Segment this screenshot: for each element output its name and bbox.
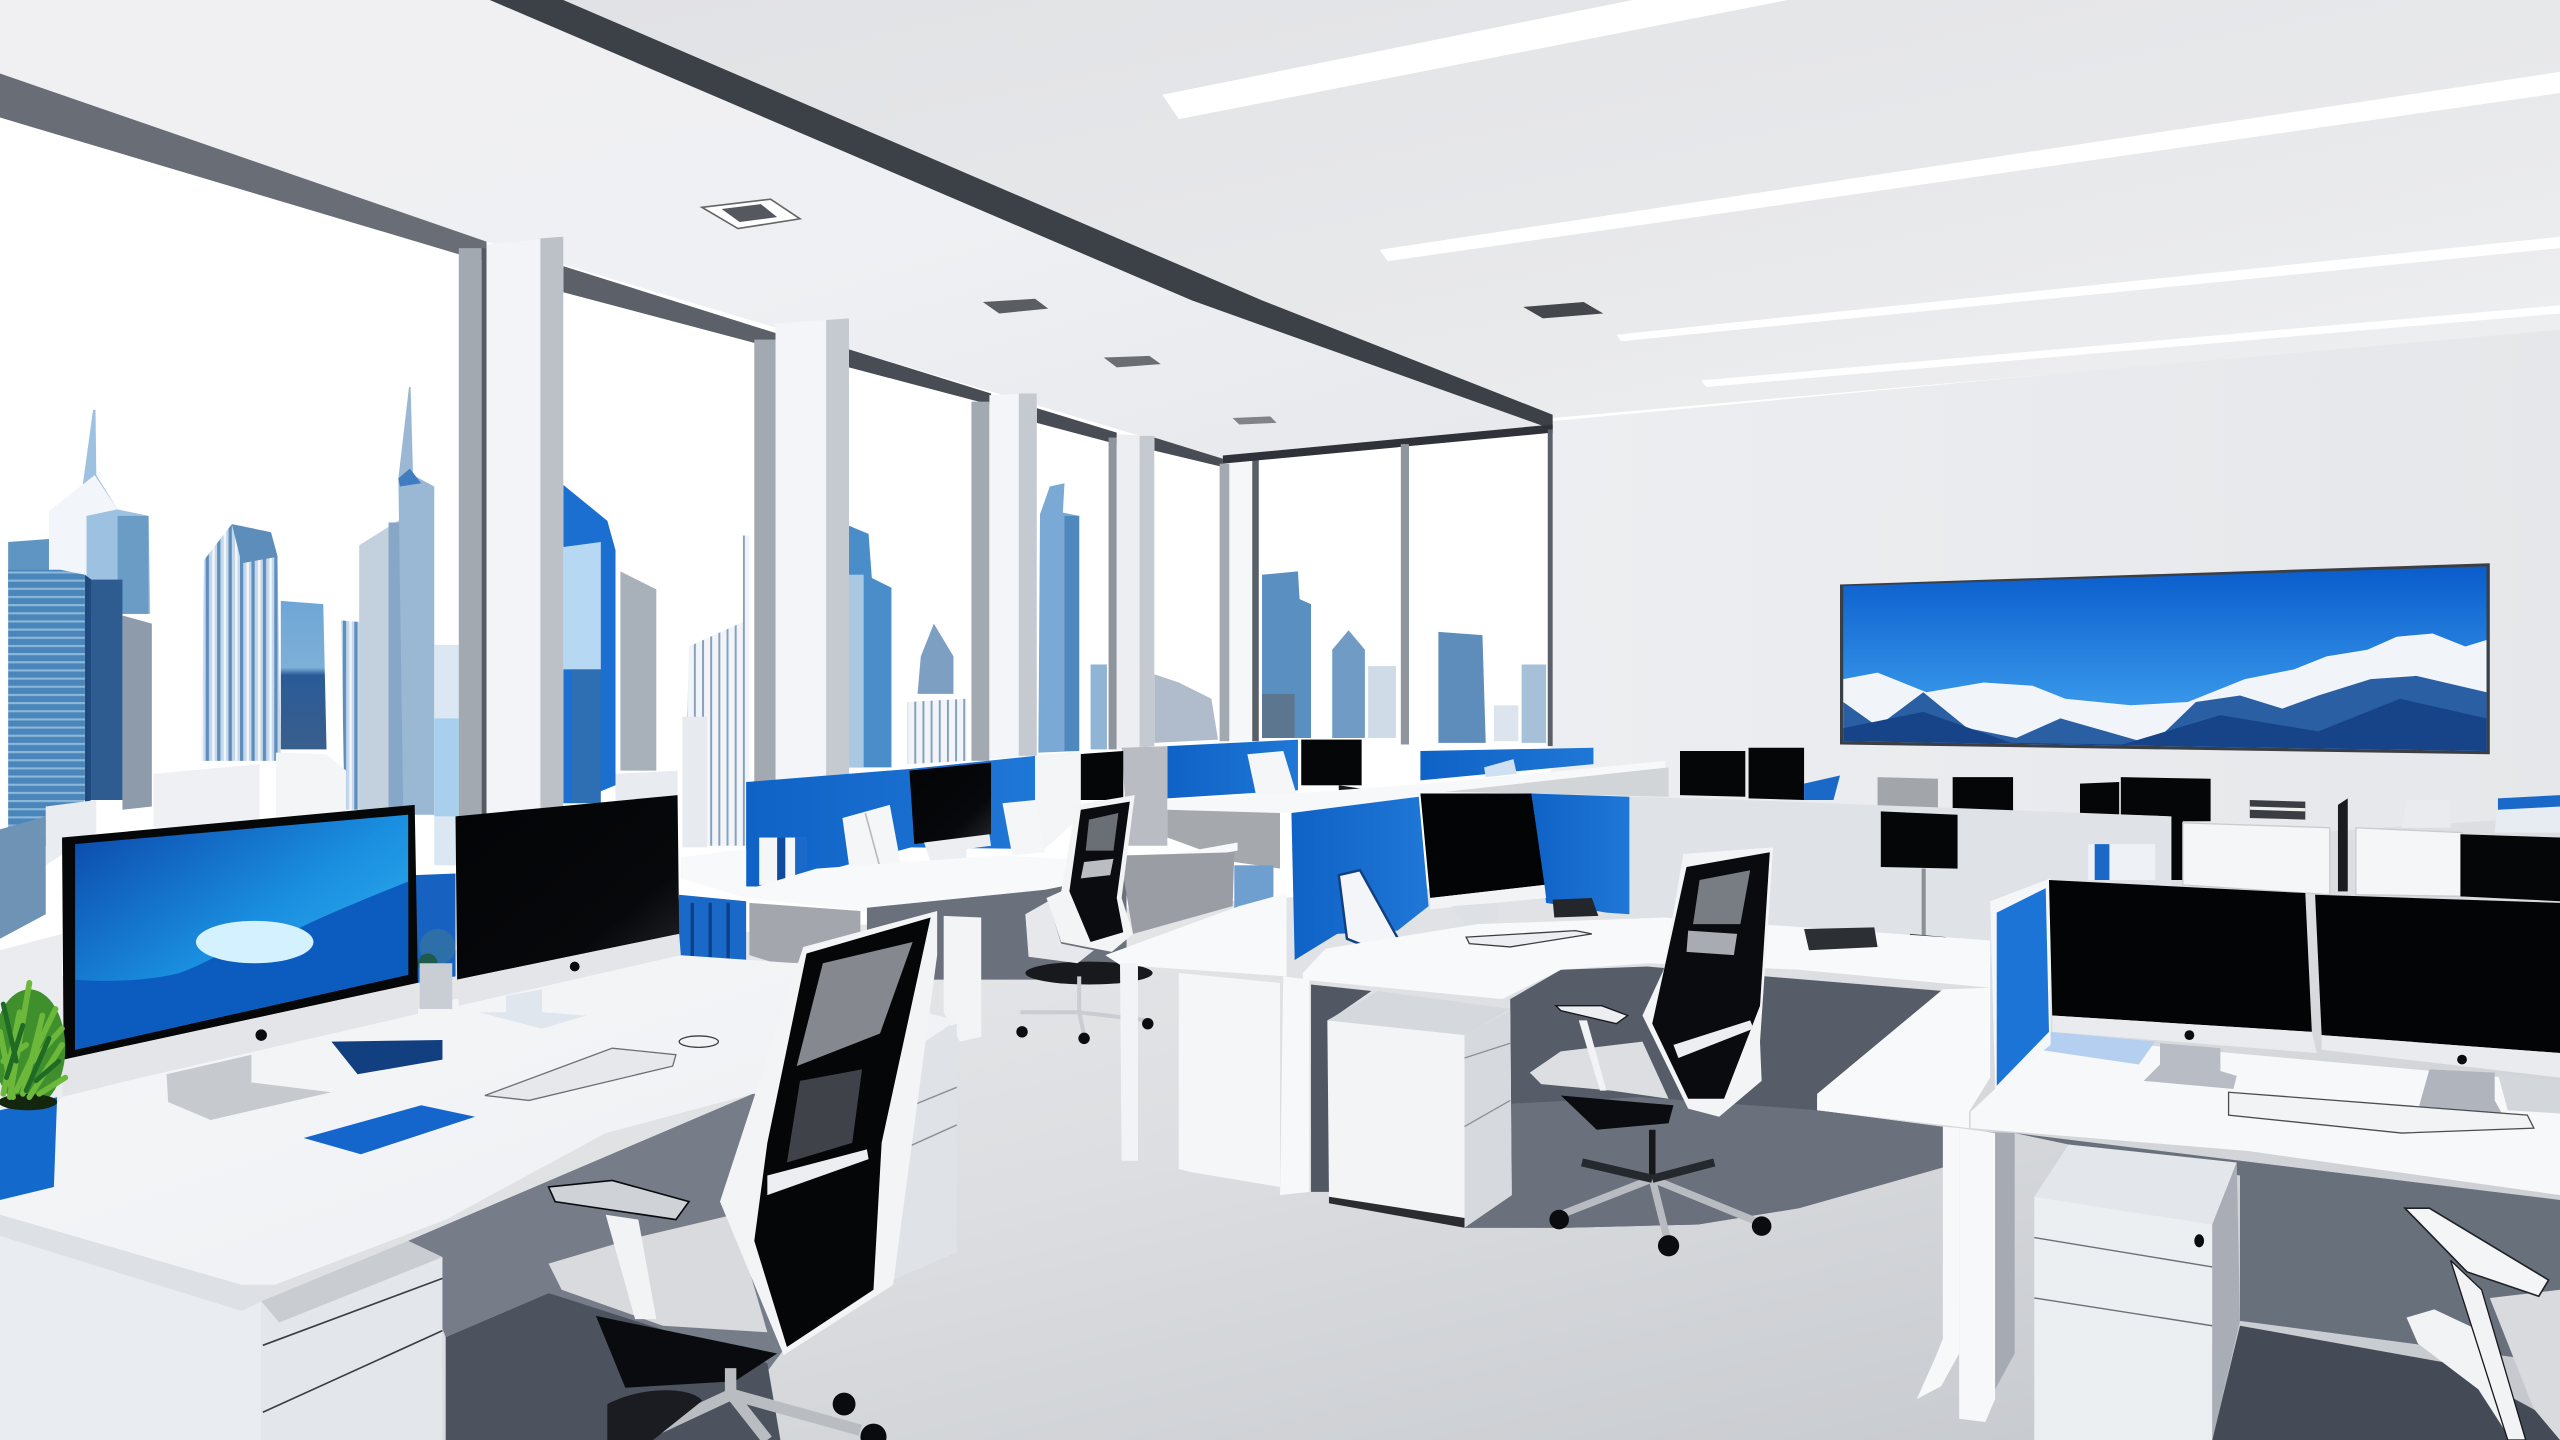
blue desk reflection xyxy=(2039,1032,2155,1064)
back office chair xyxy=(1016,795,1153,1044)
blue mouse pad xyxy=(304,1105,475,1154)
window 5 xyxy=(1154,451,1220,743)
front left workstation xyxy=(0,795,957,1440)
armrest xyxy=(549,1180,689,1220)
far cubicles and monitors xyxy=(1078,740,2560,955)
back left workstation xyxy=(669,751,1273,1042)
window 4 with skyline xyxy=(1037,423,1109,753)
center monitor xyxy=(1420,793,1546,926)
desk books xyxy=(1339,870,1401,952)
desk leg xyxy=(1120,963,1138,1161)
plant xyxy=(0,983,65,1200)
blue partition left xyxy=(1291,797,1429,960)
keyboard xyxy=(485,1048,676,1100)
monitor 1 xyxy=(2049,880,2317,1089)
window 3 with skyline xyxy=(849,367,971,767)
desk front lip xyxy=(0,1215,274,1311)
monitor black xyxy=(456,795,681,1029)
right workstation xyxy=(1817,878,2560,1440)
monitor 2 xyxy=(2315,895,2560,1115)
desk binder stack xyxy=(1553,898,1598,918)
drawer cabinet xyxy=(2034,1144,2240,1440)
center workstation xyxy=(1105,793,1990,1228)
drawer cabinet xyxy=(1327,991,1512,1228)
window 1 with skyline xyxy=(0,114,460,963)
structural columns xyxy=(487,237,1154,816)
monitor blue xyxy=(62,805,418,1120)
back outer frame xyxy=(720,911,937,1355)
desk legs xyxy=(1917,1127,1959,1399)
desk top xyxy=(1303,918,1990,999)
under seat mechanism xyxy=(596,1316,777,1388)
small plant xyxy=(418,929,456,1009)
under-desk wall xyxy=(408,1094,816,1371)
desk side panel xyxy=(0,1236,261,1440)
back wall xyxy=(1551,327,2560,914)
mouse xyxy=(679,1036,718,1047)
ceiling spot fixtures xyxy=(702,199,1603,424)
center office chair xyxy=(1530,847,1773,1256)
right foreground chair xyxy=(2405,1208,2560,1440)
arm post xyxy=(606,1215,656,1319)
seat xyxy=(549,1215,767,1332)
window 6 with skyline xyxy=(1259,446,1401,740)
book stack xyxy=(331,1040,442,1074)
ceiling vent beam xyxy=(490,0,1553,429)
desk papers xyxy=(1804,927,1878,950)
under-desk shadow xyxy=(1464,967,1953,1228)
desk divider xyxy=(1280,976,1309,1195)
under-desk floor shade xyxy=(1464,1097,1953,1228)
right ceiling xyxy=(563,0,2560,418)
cross bar xyxy=(767,1149,869,1195)
front office chair xyxy=(549,911,937,1440)
under-desk floor xyxy=(2212,1326,2560,1440)
window 7 with skyline xyxy=(1409,433,1548,744)
base xyxy=(607,1368,887,1440)
blue strip behind monitors xyxy=(415,873,456,983)
desk top xyxy=(0,955,957,1285)
cabinet left xyxy=(1179,973,1280,1187)
dark desk gap xyxy=(1311,984,1371,1192)
under-desk floor xyxy=(446,1293,780,1440)
blue panel xyxy=(1990,878,2051,1089)
right drawer unit xyxy=(865,1024,957,1280)
drawer unit xyxy=(261,1241,442,1440)
blue partition right xyxy=(1531,793,1629,914)
left ceiling xyxy=(0,0,1553,460)
keyboard xyxy=(2229,1092,2534,1133)
window sill ledge xyxy=(0,934,62,1135)
left wing desk xyxy=(1817,988,1990,1128)
black frame xyxy=(754,918,931,1347)
window 2 with skyline xyxy=(563,291,754,857)
lower mesh xyxy=(787,1069,862,1162)
floor xyxy=(0,816,2560,1440)
desk top xyxy=(1971,1037,2560,1195)
mesh xyxy=(797,942,913,1066)
desk wing xyxy=(1105,893,1287,976)
ceiling lights xyxy=(1162,0,2560,387)
wall mural of mountains xyxy=(1840,563,2490,754)
window frames xyxy=(0,73,1553,854)
under-desk wall xyxy=(2015,1133,2560,1363)
desk keyboard xyxy=(1466,931,1592,947)
